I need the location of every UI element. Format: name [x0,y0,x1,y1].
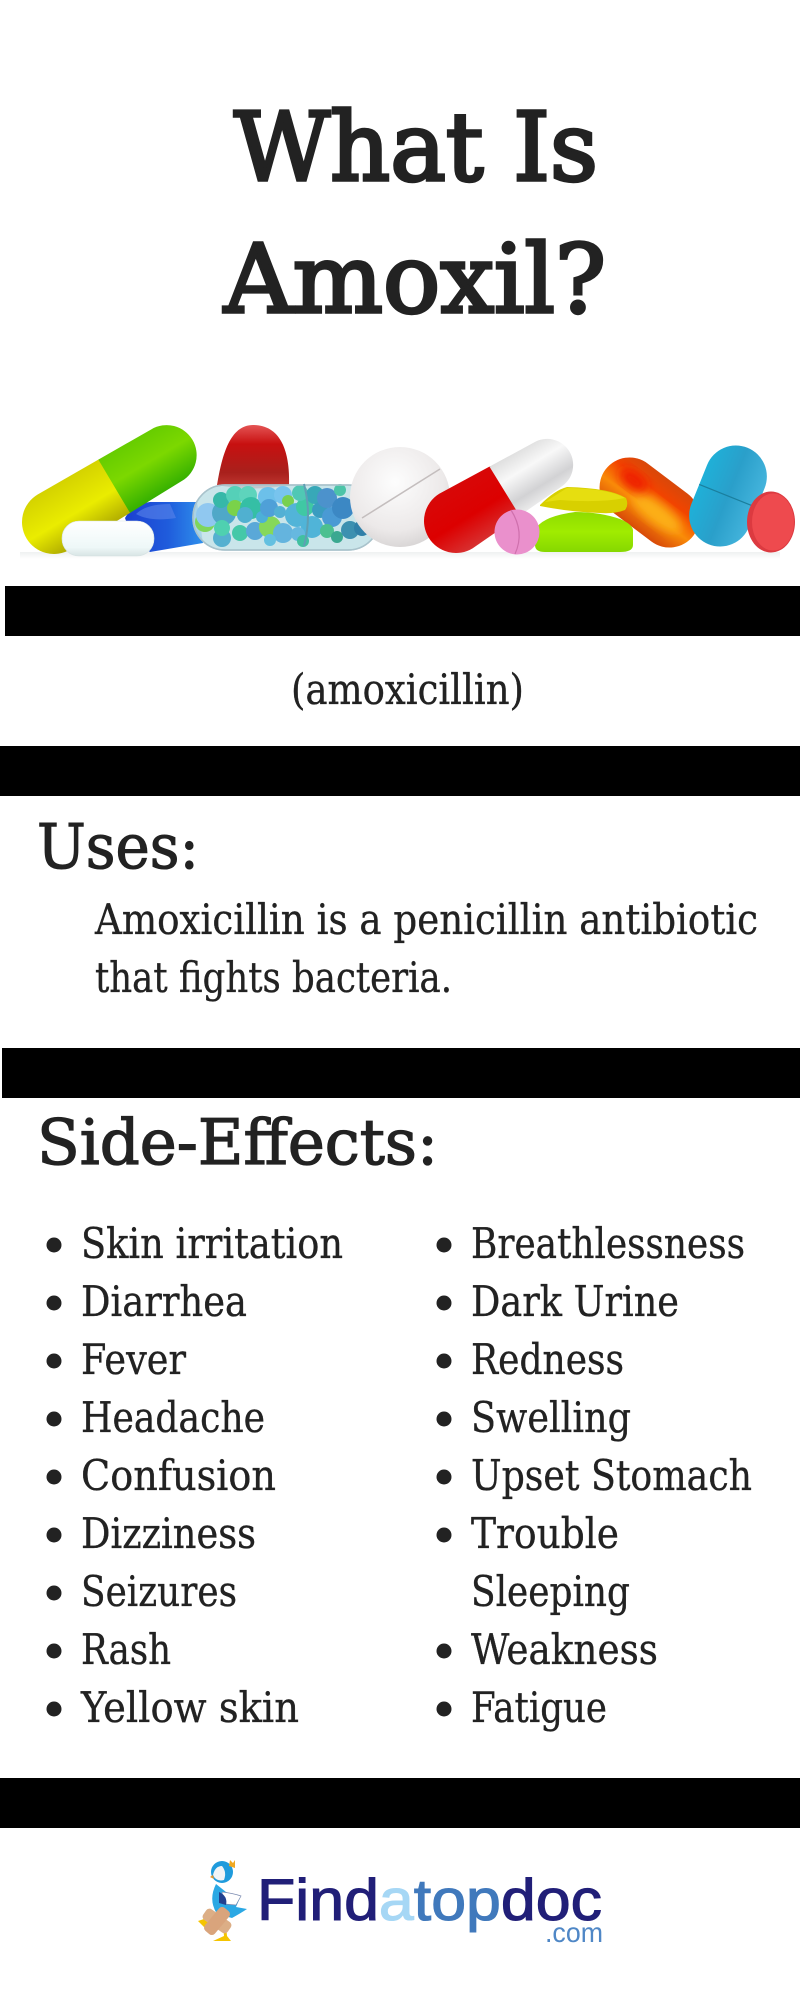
uses description [94,895,758,1002]
generic name: (amoxicillin) [291,665,524,714]
list: right column: Swelling [471,1393,631,1442]
list: right column: Dark Urine [471,1277,679,1326]
list: left column [46,1219,343,1732]
black band 4 [0,1778,800,1828]
black band 1 [5,586,800,636]
list: left column: Diarrhea [81,1277,247,1326]
illustration: assorted pills [10,412,795,566]
title [223,93,606,335]
list: left column: Yellow skin [80,1683,299,1732]
logo: Findatopdoc.com [198,1860,603,1948]
domain suffix: .com [545,1917,603,1948]
list: left column: Rash [81,1625,171,1674]
panel: uses [37,810,758,1002]
list: right column: Breathlessness [471,1219,745,1268]
list: left column: Skin irritation [81,1219,343,1268]
list: left column: Headache [81,1393,265,1442]
title: Amoxil? [223,225,606,335]
list: right column: Redness [471,1335,624,1384]
list: right column: Upset Stomach [471,1451,752,1500]
side effects heading: Side-Effects: [37,1106,438,1179]
list: left column: Fever [81,1335,187,1384]
list: right column: Weakness [471,1625,658,1674]
panel: side effects [37,1106,752,1732]
black band 2 [0,746,800,796]
uses heading: Uses: [37,810,199,883]
list: left column: Seizures [81,1567,237,1616]
list: right column: Trouble [471,1509,619,1558]
wordmark: Findatopdoc [257,1868,602,1933]
icon: bird mascot with bandage [198,1860,247,1941]
uses description: that fights bacteria. [95,953,452,1002]
list: left column: Dizziness [81,1509,256,1558]
list: right column: Sleeping [471,1567,630,1616]
list: right column: Fatigue [471,1683,607,1732]
black band 3 [2,1048,800,1098]
list: right column [436,1219,752,1732]
list: left column: Confusion [81,1451,276,1500]
title: What Is [234,93,598,203]
